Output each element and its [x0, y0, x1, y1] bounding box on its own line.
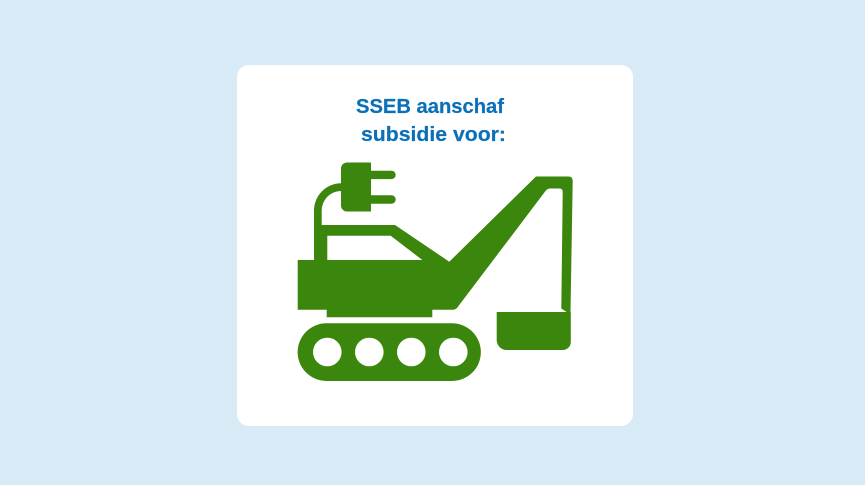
heading: SSEB aanschaf subsidie voor: subsidie voor:: [361, 123, 506, 146]
icon part: cable: [314, 183, 341, 225]
icon part: excavator body, cab and boom: [298, 176, 573, 317]
icon part: plug: [341, 162, 396, 212]
icon part: bucket: [497, 312, 571, 350]
panel: white card: [237, 65, 633, 426]
icon part: crawler track: [298, 323, 481, 381]
heading: SSEB aanschaf subsidie voor: [356, 95, 506, 146]
heading: SSEB aanschaf subsidie voor: SSEB aanschaf: [356, 95, 504, 118]
icon: electric excavator with plug: [298, 162, 573, 381]
